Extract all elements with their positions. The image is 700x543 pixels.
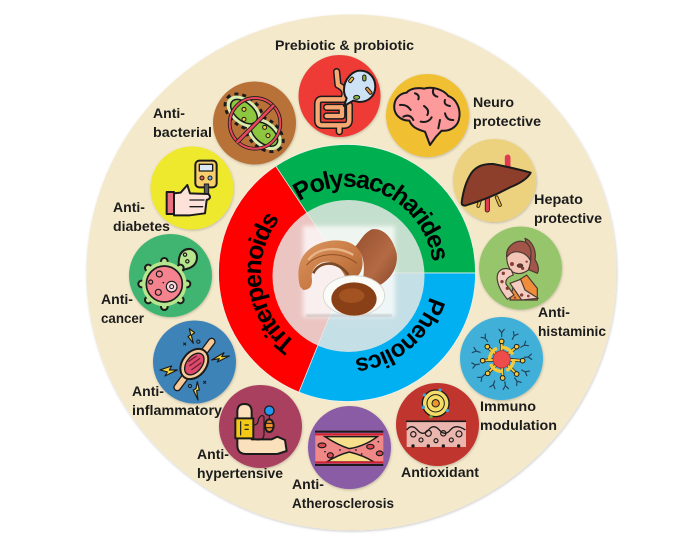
photo: mushrooms and powder bowl — [298, 226, 397, 317]
label: Immuno modulation: modulation — [480, 417, 557, 433]
label: Anti-histaminic: Anti- — [538, 304, 570, 320]
ring: triterpenoids segment — [219, 166, 347, 392]
icon: blood pressure cuff on arm — [219, 385, 302, 468]
label: Antioxidant: Antioxidant — [401, 464, 479, 480]
icon: antioxidant skin and atom — [396, 383, 479, 466]
label: Anti-cancer: Anti- — [101, 291, 133, 307]
label: Anti-diabetes: diabetes — [113, 218, 170, 234]
label: Anti-inflammatory — [132, 383, 222, 418]
translucent inner disc — [272, 200, 424, 352]
icon: crossed-out bacteria — [213, 82, 296, 164]
label: Anti-bacterial — [153, 105, 212, 140]
label: Anti-hypertensive — [197, 446, 283, 481]
heading: Phenolics: Phenolics — [356, 298, 445, 371]
label: Anti-cancer: cancer — [101, 310, 145, 326]
label: Neuro protective — [473, 94, 541, 129]
label: Hepato protective — [534, 191, 602, 226]
label: Immuno modulation: Immuno — [480, 398, 536, 414]
label: Anti-histaminic: histaminic — [538, 323, 606, 339]
label: Anti-hypertensive: hypertensive — [197, 465, 283, 481]
icon: immune virus and antibodies — [460, 317, 543, 400]
label: Hepato protective: Hepato — [534, 191, 583, 207]
label: Hepato protective: protective — [534, 210, 602, 226]
label: Prebiotic & probiotic: Prebiotic & probiotic — [275, 37, 414, 53]
label: Neuro protective: protective — [473, 113, 541, 129]
ring: polysaccharides segment — [276, 145, 476, 273]
icon: atherosclerotic artery — [308, 406, 391, 489]
ring: phenolics segment — [299, 273, 476, 401]
label: Anti-cancer — [101, 291, 145, 326]
label: Anti-inflammatory: inflammatory — [132, 402, 222, 418]
label: Anti-diabetes: Anti- — [113, 199, 145, 215]
icon: liver — [453, 139, 536, 222]
label: Anti-histaminic — [538, 304, 606, 339]
heading: Triterpenoids: Triterpenoids — [248, 214, 292, 356]
big cream disc — [86, 14, 616, 530]
icon: woman with allergic rash — [479, 226, 562, 310]
label: Anti-hypertensive: Anti- — [197, 446, 229, 462]
icon: inflamed muscle — [153, 320, 236, 404]
icon: cancer cell — [129, 234, 212, 317]
heading: Polysaccharides: Polysaccharides — [292, 170, 445, 260]
label: Anti-bacterial: Anti- — [153, 105, 185, 121]
label: Anti-bacterial: bacterial — [153, 124, 212, 140]
label: Neuro protective: Neuro — [473, 94, 514, 110]
label: Anti-diabetes — [113, 199, 170, 234]
label: Immuno modulation — [480, 398, 557, 433]
label: Anti-inflammatory: Anti- — [132, 383, 164, 399]
icon: brain — [386, 74, 469, 157]
label: Anti-Atherosclerosis: Atherosclerosis — [292, 495, 394, 511]
label: Anti-Atherosclerosis: Anti- — [292, 476, 324, 492]
icon: prebiotic gut and microbes — [298, 55, 380, 137]
icon: hand with glucose meter — [150, 146, 234, 230]
label: Anti-Atherosclerosis — [292, 476, 394, 511]
